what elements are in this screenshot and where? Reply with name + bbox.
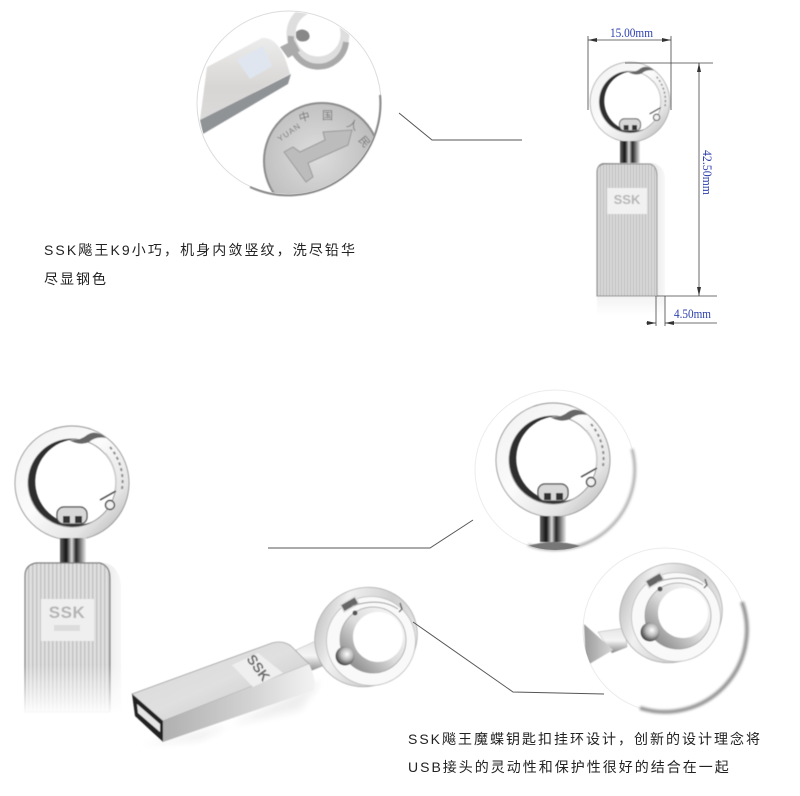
arrow: leader line top bbox=[399, 113, 522, 140]
text block: bottom description: SSK飚王魔蝶钥匙扣挂环设计，创新的设计理念将 bbox=[408, 731, 762, 747]
icon: tilted drive with ring bbox=[200, 7, 346, 134]
dimension lines bbox=[588, 36, 717, 326]
width label: 15.00mm bbox=[610, 25, 653, 40]
text block: top description: 尽显钢色 bbox=[44, 271, 108, 287]
USB opening bbox=[132, 694, 163, 742]
text block: bottom description: USB接头的灵动性和保护性很好的结合在一起 bbox=[408, 759, 731, 775]
icon: ring detail tilted bbox=[598, 628, 627, 653]
dimension arrowheads bbox=[588, 38, 701, 325]
top face bbox=[132, 642, 309, 721]
icon: upright drive bbox=[590, 62, 670, 315]
icon: ring detail bbox=[496, 403, 610, 517]
text block: bottom description bbox=[408, 731, 762, 775]
icon: one yuan coin: 人 bbox=[344, 115, 361, 134]
icon: one yuan coin: 国 bbox=[322, 107, 333, 123]
panel: ring close-up circle bbox=[475, 390, 635, 552]
text block: top description bbox=[44, 242, 357, 287]
arrow: leader line middle bbox=[268, 520, 473, 548]
logo plate: SSK bbox=[49, 603, 85, 622]
logo plate bbox=[607, 188, 647, 214]
panel: dimension drawing bbox=[588, 25, 717, 326]
arrow: leader line bottom bbox=[413, 622, 604, 694]
icon: one yuan coin: YUAN bbox=[276, 121, 303, 144]
depth label: 4.50mm bbox=[674, 306, 711, 321]
icon: one yuan coin: 民 bbox=[355, 132, 374, 151]
logo plate bbox=[41, 599, 94, 641]
logo plate: SSK bbox=[614, 192, 641, 207]
icon: lying drive with ring bbox=[132, 569, 436, 745]
icon: one yuan coin: 中 bbox=[297, 108, 312, 126]
icon: large upright drive bbox=[15, 426, 130, 715]
logo plate bbox=[232, 651, 283, 687]
icon: one yuan coin bbox=[262, 101, 374, 194]
panel: coin size comparison circle bbox=[196, 10, 382, 197]
text block: top description: SSK飚王K9小巧，机身内敛竖纹，洗尽铅华 bbox=[44, 242, 357, 258]
front side bbox=[163, 664, 315, 742]
panel: carabiner close-up circle bbox=[583, 545, 747, 712]
height label: 42.50mm bbox=[700, 150, 715, 195]
logo plate: SSK bbox=[244, 651, 273, 684]
